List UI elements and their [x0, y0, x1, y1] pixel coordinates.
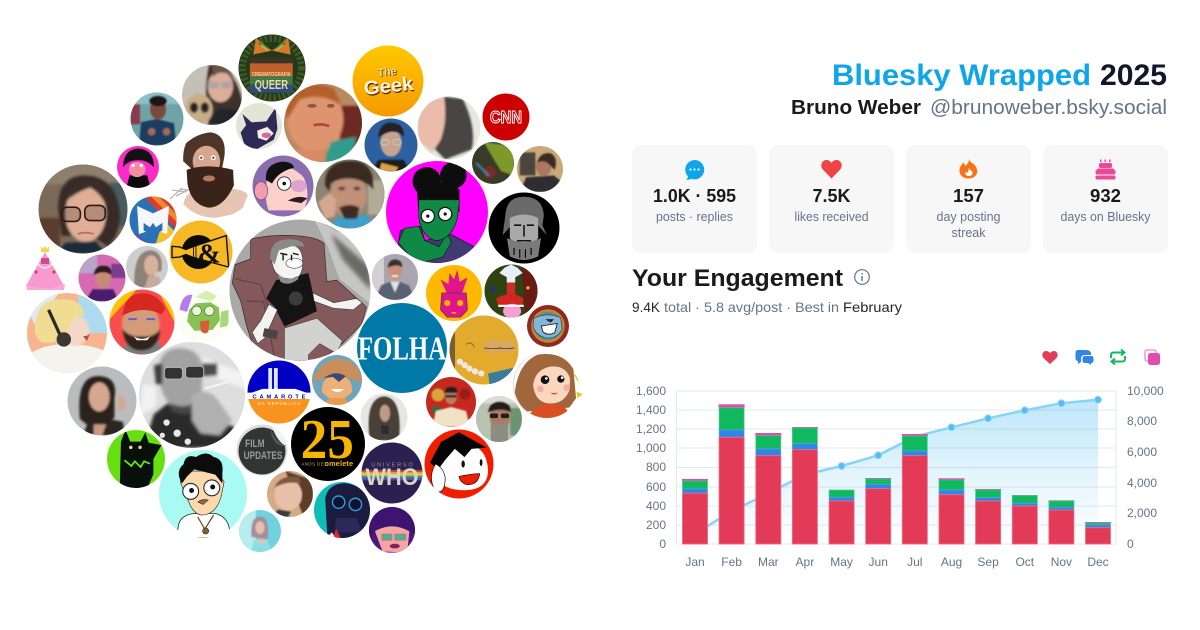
avatar: yellow ampersand megaphone: &	[198, 238, 221, 269]
avatar: CNN logo	[482, 94, 530, 140]
panel: posts and replies: posts · replies	[656, 210, 733, 224]
left axis labels: 1,200	[636, 422, 666, 436]
month labels: Jan	[685, 555, 705, 569]
month labels	[685, 555, 1109, 569]
engagement summary text	[632, 299, 902, 315]
avatar: woman with headphones	[27, 293, 107, 373]
avatar: green frog doodle	[176, 288, 230, 342]
user name and handle	[791, 97, 1167, 119]
avatar: 25 anos de omelete: ANOS DE	[301, 461, 324, 466]
left axis labels: 400	[646, 499, 666, 513]
avatar cluster	[26, 34, 581, 553]
avatar: curly-haired man	[316, 160, 384, 228]
month labels: Aug	[941, 555, 962, 569]
avatar: Cinematografia Queer wreath: QUEER	[255, 77, 288, 92]
left axis labels	[636, 384, 666, 551]
avatar: Film Updates sticker	[236, 424, 288, 476]
avatar: The Geek logo: Geek	[364, 75, 416, 101]
avatar: curly-haired woman	[68, 366, 136, 436]
avatar: black creature on green	[107, 430, 165, 488]
avatar: pink robot on yellow	[426, 265, 482, 321]
avatar: person with rainbow collar	[364, 118, 418, 172]
cumulative area	[695, 400, 1098, 544]
avatar: Lisa Simpson meme	[450, 316, 518, 384]
avatar: woman with glasses	[38, 164, 128, 254]
icon: flame	[959, 159, 977, 178]
avatar: green cartoon woman on magenta	[386, 161, 488, 263]
avatar: Film Updates sticker: FILM	[245, 438, 265, 450]
avatar: redhead woman	[284, 84, 364, 162]
cumulative line	[695, 400, 1098, 534]
icon: legend quotes	[1145, 350, 1160, 365]
avatar: cartoon man on purple	[252, 156, 314, 216]
avatar: black and white cat	[236, 103, 282, 149]
icon: legend reposts	[1111, 350, 1125, 364]
left axis labels: 0	[659, 537, 666, 551]
month labels: Mar	[758, 555, 779, 569]
avatar: cartoon man in armchair	[230, 220, 370, 360]
stacked bars	[682, 404, 1111, 544]
avatar: woman on purple background	[78, 254, 126, 302]
panel: days on Bluesky: 932	[1090, 186, 1121, 206]
month labels: May	[830, 555, 853, 569]
avatar: 25 anos de omelete: 25	[301, 409, 354, 471]
panel: day posting streak: 157	[953, 186, 984, 206]
title: Bluesky Wrapped	[832, 59, 1091, 92]
month labels: Apr	[796, 555, 814, 569]
panel: day posting streak	[906, 145, 1031, 253]
avatar: Universo Who: UNIVERSO	[371, 462, 413, 468]
engagement summary text: February	[843, 299, 902, 315]
avatar: Vader with sunglasses	[314, 482, 370, 538]
panel: posts and replies	[632, 145, 757, 253]
heading: Your Engagement: Your Engagement	[632, 265, 843, 292]
icon: legend replies	[1076, 350, 1094, 365]
avatar: cartoon man with round glasses on cyan	[159, 450, 247, 538]
legend icons	[1042, 350, 1160, 365]
avatar: man on teal street	[130, 92, 184, 146]
right axis labels	[1127, 384, 1164, 551]
avatar: woman close-up	[267, 471, 313, 517]
avatar: cartoon on red	[424, 430, 494, 498]
right axis labels: 6,000	[1127, 445, 1157, 459]
avatar: man with sunglasses holding book	[476, 396, 522, 443]
month labels: Sep	[977, 555, 999, 569]
panel: likes received: 7.5K	[812, 186, 850, 206]
avatar: grey-haired woman	[126, 246, 168, 288]
panel: days on Bluesky: days on Bluesky	[1060, 210, 1151, 224]
left axis labels: 1,600	[636, 384, 666, 398]
avatar: CNN logo: CNN	[490, 107, 522, 127]
icon: info	[855, 270, 869, 284]
avatar: man looking sideways	[517, 146, 563, 192]
month labels: Feb	[721, 555, 742, 569]
avatar: pink cartoon girl	[117, 146, 159, 188]
avatar: man in suit	[372, 254, 418, 300]
engagement summary text: total · 5.8 avg/post · Best in	[664, 299, 839, 315]
cumulative points	[838, 396, 1101, 469]
month labels: Dec	[1087, 555, 1109, 569]
icon: legend heart	[1042, 351, 1058, 364]
avatar: pink Christmas tree	[26, 246, 65, 290]
signature scribble	[170, 188, 188, 199]
panel: likes received: likes received	[794, 210, 869, 224]
panel: likes received	[769, 145, 894, 253]
avatar: The Geek logo: The	[377, 65, 397, 79]
avatar: Christmas robot figure	[484, 264, 538, 319]
avatar: cartoon brunette girl	[513, 352, 581, 418]
user name and handle: @brunoweber.bsky.social	[930, 97, 1167, 119]
panel: day posting streak: day posting	[936, 210, 1001, 224]
panel: posts and replies: 1.0K · 595	[653, 186, 736, 206]
avatar: Universo Who: WHO	[365, 464, 419, 491]
avatar: Film Updates sticker: UPDATES	[244, 450, 283, 462]
month labels: Oct	[1015, 555, 1035, 569]
left axis labels: 1,000	[636, 441, 666, 455]
avatar: green abstract figure	[472, 142, 514, 184]
icon: chat bubble	[685, 160, 704, 180]
month labels: Jul	[907, 555, 922, 569]
avatar: Camarote da Republica logo	[248, 360, 310, 424]
right axis labels: 2,000	[1127, 506, 1157, 520]
panel: day posting streak: streak	[952, 226, 986, 240]
title: 2025	[1100, 59, 1167, 92]
left axis labels: 600	[646, 480, 666, 494]
avatar: Cinematografia Queer wreath	[238, 34, 306, 102]
avatar: yellow ampersand megaphone	[170, 220, 232, 284]
avatar: Camarote da Republica logo: CAMAROTE	[253, 394, 306, 400]
chart: monthly engagement stacked bars with cumulative line	[636, 384, 1164, 569]
avatar: 25 anos de omelete	[291, 407, 365, 481]
avatar: The Geek logo	[352, 46, 424, 116]
avatar: FOLHA logo: FOLHA	[358, 331, 446, 368]
avatar: man smoking black and white	[139, 342, 245, 448]
avatar: dark-haired woman	[418, 96, 480, 160]
avatar: blue monster in ring	[527, 305, 569, 347]
icon: birthday cake	[1096, 160, 1116, 180]
left axis labels: 1,400	[636, 403, 666, 417]
avatar: long-haired man	[360, 394, 408, 440]
avatar: The Geek logo: Geek	[363, 74, 415, 100]
engagement summary text: 9.4K	[632, 299, 661, 315]
avatar: purple-haired girl with green glasses	[369, 507, 415, 553]
avatar: woman with skull	[182, 64, 245, 125]
left axis labels: 200	[646, 518, 666, 532]
avatar: man on red patterned wall	[426, 377, 476, 427]
avatar: bearded man sketch	[183, 132, 248, 218]
avatar: Camarote da Republica logo: DA REPÚBLICA	[258, 400, 301, 406]
avatar: rainbow M logo	[130, 196, 176, 244]
avatar: FOLHA logo	[357, 303, 447, 393]
avatar: 25 anos de omelete: omelete	[324, 459, 353, 468]
right axis labels: 8,000	[1127, 414, 1157, 428]
user name and handle: Bruno Weber	[791, 97, 921, 119]
avatar: Universo Who	[362, 442, 422, 504]
avatar: The Geek logo: The	[378, 66, 398, 80]
month labels: Jun	[869, 555, 888, 569]
month labels: Nov	[1051, 555, 1072, 569]
right axis labels: 10,000	[1127, 384, 1164, 398]
right axis labels: 0	[1127, 537, 1134, 551]
right axis labels: 4,000	[1127, 476, 1157, 490]
avatar: black and white engraved face	[488, 192, 560, 264]
avatar: straw hat cartoon	[312, 355, 362, 405]
avatar: woman on teal background	[239, 510, 281, 552]
avatar: man with red cap smiling	[110, 290, 174, 354]
left axis labels: 800	[646, 460, 666, 474]
avatar: Cinematografia Queer wreath: CINEMATOGRAFIA	[252, 72, 291, 78]
panel: days on Bluesky	[1043, 145, 1168, 253]
icon: heart	[821, 160, 842, 178]
